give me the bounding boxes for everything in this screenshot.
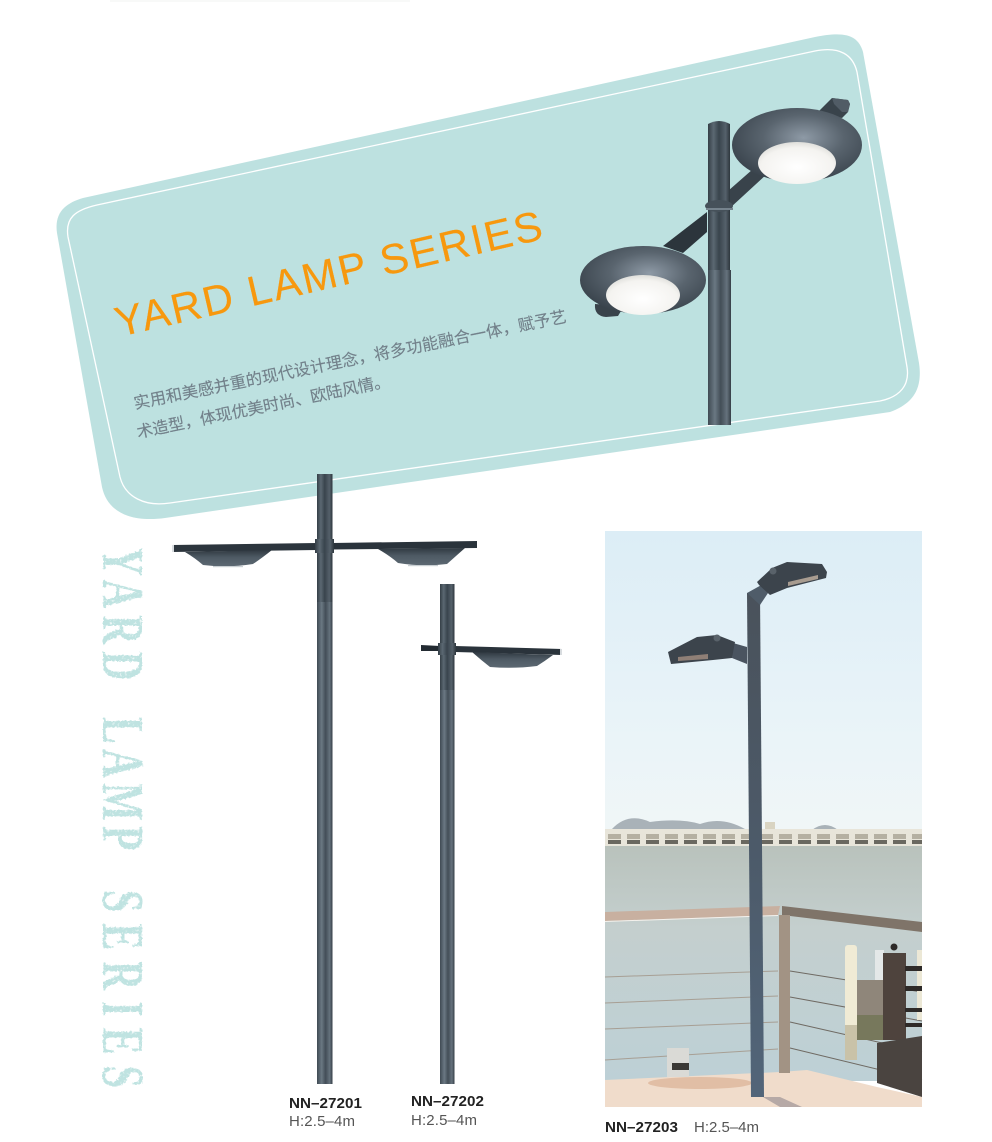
label: NN-27202 [411,1093,484,1129]
label: NN-27203 [605,1119,759,1136]
label: NN-27201 [289,1095,363,1130]
heading: yard lamp series: YARD LAMP SERIES [110,202,547,346]
decorative vertical text: yard lamp series: SERIES [90,890,156,1088]
text block: description: 实用和美感并重的现代设计理念，将多功能融合一体，赋予艺 [132,307,568,413]
label: NN-27201: H:2.5–4m [289,1113,355,1130]
photo: installed lamp NN-27203 on waterfront [605,531,922,1107]
product: lamp NN-27201 [172,474,477,1084]
decorative vertical text: yard lamp series: LAMP [90,717,156,850]
product: lamp NN-27202 [421,584,562,1084]
text block: description: 术造型，体现优美时尚、欧陆风情。 [135,372,392,442]
decorative vertical text: yard lamp series [90,547,156,1088]
label: NN-27201: NN–27201 [289,1095,363,1112]
label: NN-27202: NN–27202 [411,1093,484,1110]
decorative vertical text: yard lamp series: YARD [90,547,156,680]
label: NN-27203: NN–27203 [605,1119,678,1136]
panel: teal banner card [57,34,920,519]
label: NN-27203: H:2.5–4m [694,1119,759,1136]
product image: angled double lamp [580,98,862,425]
label: NN-27202: H:2.5–4m [411,1112,477,1129]
